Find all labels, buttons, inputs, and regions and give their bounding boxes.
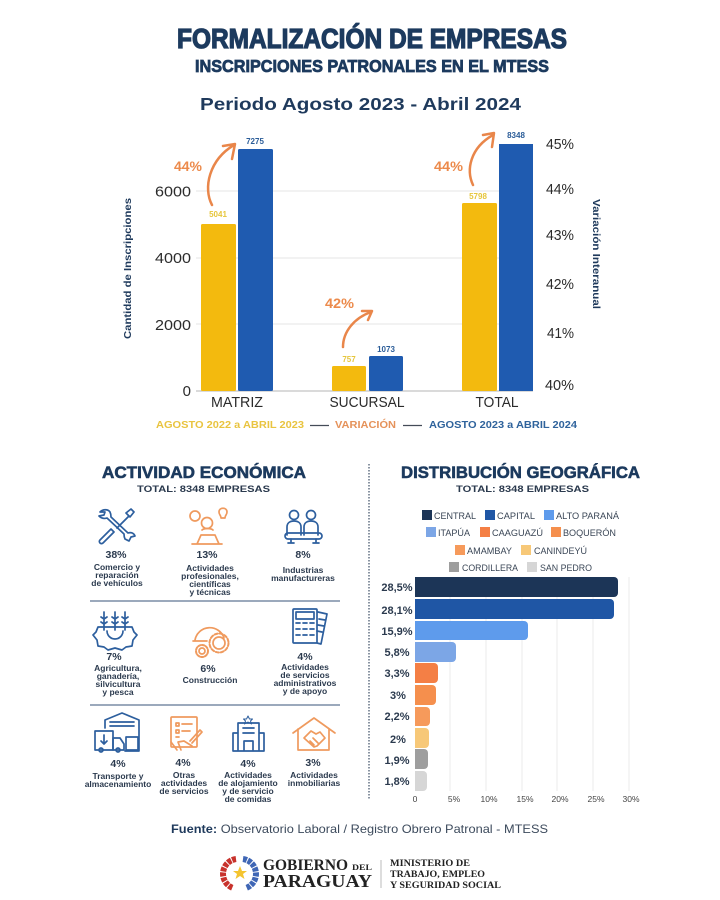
heading: actividad económica: ACTIVIDAD ECONÓMICA (102, 463, 306, 482)
right axis labels: 44% (546, 181, 574, 198)
icon: truck and warehouse (95, 713, 139, 752)
bar value labels: 1,9% (384, 755, 410, 767)
left axis title: Cantidad de Inscripciones (122, 198, 134, 339)
bar value labels: 28,5% (381, 582, 413, 594)
item: construcción: Construcción (183, 675, 237, 685)
x axis labels (413, 794, 640, 804)
item: comercio: reparación (95, 570, 139, 580)
item: construcción (183, 628, 237, 685)
geographic legend: CENTRAL (434, 511, 476, 522)
bar value labels: 15,9% (381, 626, 413, 638)
geographic legend: SAN PEDRO (540, 563, 592, 574)
heading: actividad económica: TOTAL: 8348 EMPRESAS (137, 484, 270, 495)
item: transporte: 4% (110, 758, 126, 770)
item: agricultura: ganadería, (97, 671, 139, 681)
icon: coat of arms (223, 859, 256, 888)
item: servicios administrativos: administrativos (274, 678, 337, 688)
bars: total: 8348 (507, 131, 525, 140)
icon: workers on conveyor (285, 510, 322, 543)
item: servicios administrativos: Actividades (281, 662, 329, 672)
geographic legend: CANINDEYÚ (534, 546, 587, 557)
geographic legend (422, 510, 620, 574)
item: industrias: manufactureras (271, 573, 335, 583)
item: industrias: Industrias (283, 565, 324, 575)
item: profesionales: científicas (189, 579, 231, 589)
geographic legend: ITAPÚA (438, 528, 471, 539)
bars: total: TOTAL (476, 394, 518, 411)
chart legend: AGOSTO 2023 a ABRIL 2024 (429, 420, 577, 431)
geographic legend: BOQUERÓN (563, 528, 616, 539)
item: otras actividades: actividades (161, 778, 207, 788)
bar value labels (381, 582, 413, 788)
bar value labels: 2,2% (384, 711, 410, 723)
label: 42%: 42% (325, 295, 355, 311)
logo: gobierno del paraguay: PARAGUAY (263, 871, 372, 891)
bar value labels: 1,8% (384, 776, 410, 788)
item: servicios administrativos: 4% (297, 651, 313, 663)
bar value labels: 3,3% (384, 668, 410, 680)
bar value labels: 28,1% (381, 605, 413, 617)
bar value labels: 2% (390, 734, 406, 746)
logo: gobierno del paraguay: TRABAJO, EMPLEO (390, 869, 485, 879)
item: alojamiento: Actividades (224, 770, 272, 780)
icon: calculator and papers (293, 609, 327, 644)
geographic legend: CAAGUAZÚ (492, 528, 543, 539)
bars: sucursal: 757 (342, 355, 356, 364)
left axis labels (155, 184, 191, 400)
icon: house and handshake (293, 718, 335, 750)
label: 44% matriz: 44% (174, 158, 203, 174)
label: 44% total: 44% (434, 158, 464, 174)
logo: gobierno del paraguay: DEL (352, 863, 372, 872)
item: alojamiento: de alojamiento (218, 778, 278, 788)
icon: tools (99, 509, 135, 544)
item: inmobiliarias: Actividades (290, 770, 338, 780)
chart legend: AGOSTO 2022 a ABRIL 2023 (156, 420, 304, 431)
vertical divider (368, 464, 370, 800)
right axis labels: 42% (546, 276, 574, 293)
item: servicios administrativos: de servicios (280, 670, 330, 680)
panel: actividad económica (85, 508, 340, 804)
x axis labels: 20% (551, 794, 569, 804)
right axis labels: 41% (547, 325, 574, 342)
item: inmobiliarias: 3% (305, 757, 321, 769)
item: profesionales (181, 508, 239, 597)
geographic legend: ALTO PARANÁ (556, 511, 620, 522)
item: alojamiento: de comidas (225, 794, 272, 804)
heading: distribución geográfica (401, 463, 640, 495)
logo: gobierno del paraguay: MINISTERIO DE (390, 858, 470, 868)
item: transporte: Transporte y (92, 771, 144, 781)
right axis labels: 40% (545, 377, 574, 394)
geographic legend: CORDILLERA (462, 563, 519, 574)
title: INSCRIPCIONES PATRONALES EN EL MTESS (195, 56, 549, 76)
right axis labels (545, 136, 574, 394)
item: profesionales: Actividades (186, 563, 234, 573)
x axis labels: 5% (448, 794, 461, 804)
item: agricultura: Agricultura, (94, 663, 142, 673)
item: industrias (271, 510, 335, 583)
bar chart: inscripciones (122, 131, 602, 411)
heading: distribución geográfica: TOTAL: 8348 EMPRESAS (456, 484, 589, 495)
item: transporte (85, 713, 151, 789)
item: otras actividades: 4% (175, 757, 191, 769)
item: transporte: almacenamiento (85, 779, 151, 789)
chart legend: VARIACIÓN (335, 418, 396, 431)
subtitle: period: Periodo Agosto 2023 - Abril 2024 (200, 94, 521, 114)
right axis labels: 43% (546, 227, 574, 244)
logo: gobierno del paraguay (223, 857, 501, 891)
item: profesionales: profesionales, (181, 571, 239, 581)
item: agricultura: y pesca (102, 687, 134, 697)
bars: matriz: MATRIZ (211, 394, 263, 411)
item: comercio (91, 509, 143, 588)
right axis labels: 45% (546, 136, 574, 153)
item: servicios administrativos: y de apoyo (283, 686, 327, 696)
logo: gobierno del paraguay: GOBIERNO (263, 857, 348, 874)
horizontal bar chart: geographic distribution (381, 577, 640, 804)
left axis labels: 4000 (155, 250, 191, 267)
item: comercio: 38% (105, 549, 127, 561)
item: otras actividades: Otras (173, 770, 195, 780)
item: comercio: de vehículos (91, 578, 143, 588)
x axis labels: 30% (622, 794, 640, 804)
x axis labels: 15% (516, 794, 534, 804)
title: FORMALIZACIÓN DE EMPRESAS (177, 23, 567, 54)
arrow: matriz 44% (208, 144, 235, 205)
left axis labels: 0 (183, 383, 191, 400)
icon: wheat and gear (93, 612, 137, 650)
arrow: sucursal 42% (343, 311, 372, 347)
item: alojamiento (218, 716, 278, 804)
item: otras actividades: de servicios (159, 786, 209, 796)
x axis labels: 25% (587, 794, 605, 804)
heading: actividad económica (102, 463, 306, 495)
left axis labels: 6000 (155, 184, 191, 200)
bars: total (462, 131, 533, 411)
bar value labels: 5,8% (384, 647, 410, 659)
item: comercio: Comercio y (94, 562, 140, 572)
item: profesionales: y técnicas (189, 587, 231, 597)
heading: distribución geográfica: DISTRIBUCIÓN GEOGRÁFICA (401, 463, 640, 482)
item: profesionales: 13% (196, 549, 218, 561)
item: agricultura (93, 612, 142, 697)
item: alojamiento: y de servicio (222, 786, 274, 796)
bars: matriz (201, 137, 273, 411)
chart legend (156, 418, 577, 431)
geographic legend: AMAMBAY (467, 546, 513, 557)
icon: hotel (233, 716, 264, 751)
bar value labels: 3% (390, 690, 406, 702)
item: industrias: 8% (295, 549, 311, 561)
arrow: total 44% (470, 133, 494, 185)
bars: sucursal: 1073 (377, 345, 395, 354)
left axis labels: 2000 (155, 317, 191, 334)
title (177, 23, 567, 76)
item: agricultura: silvicultura (96, 679, 141, 689)
bars: sucursal: SUCURSAL (330, 394, 404, 411)
item: inmobiliarias: inmobiliarias (288, 778, 340, 788)
item: otras actividades (159, 717, 209, 796)
bars: matriz: 5041 (209, 210, 227, 219)
item: inmobiliarias (288, 718, 340, 788)
item: alojamiento: 4% (240, 758, 256, 770)
icon: signing document (171, 717, 202, 750)
icon: professional at laptop (190, 508, 227, 544)
x axis labels: 10% (480, 794, 498, 804)
icon: helmet and gears (193, 628, 228, 657)
bars: sucursal (330, 345, 404, 411)
source: Fuente: Observatorio Laboral / Registro Obrero Patronal - MTESS (171, 822, 548, 836)
item: agricultura: 7% (106, 651, 122, 663)
logo: gobierno del paraguay: Y SEGURIDAD SOCIAL (390, 880, 501, 890)
geographic legend: CAPITAL (497, 511, 535, 522)
x axis labels: 0 (413, 794, 418, 804)
item: servicios administrativos (274, 609, 337, 696)
bars: total: 5798 (469, 192, 487, 201)
item: construcción: 6% (200, 663, 216, 675)
bars: matriz: 7275 (246, 137, 264, 146)
right axis title: Variación Interanual (590, 199, 602, 309)
